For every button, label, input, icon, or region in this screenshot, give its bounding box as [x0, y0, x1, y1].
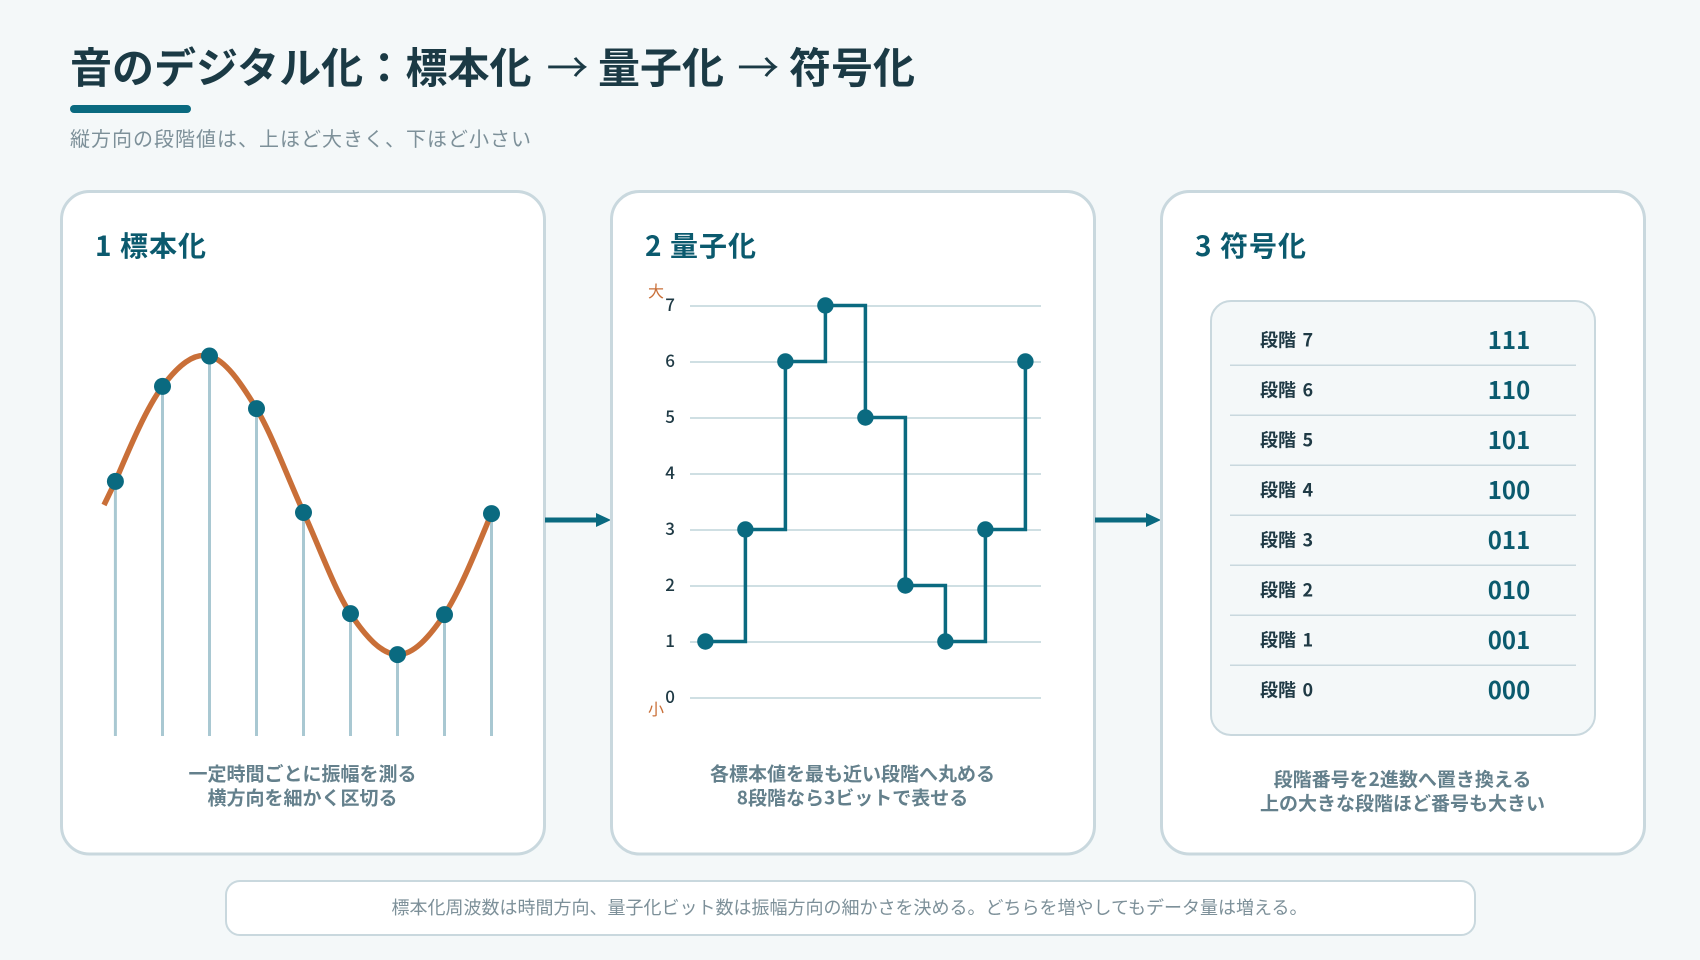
sample stems: [115, 356, 492, 736]
binary codes: 001: [1488, 621, 1530, 656]
level labels: 6: [1302, 376, 1313, 402]
binary codes: 110: [1488, 371, 1530, 406]
quantized points: [697, 297, 1034, 650]
axis level labels: 3: [665, 515, 675, 540]
binary codes: 010: [1488, 571, 1530, 606]
binary codes: 101: [1488, 421, 1530, 456]
title underline: [70, 105, 191, 113]
level labels: 段階: [1260, 376, 1296, 402]
level labels: 0: [1302, 676, 1313, 702]
panel heading: coding: 3: [1195, 225, 1213, 265]
title: 音のデジタル化：: [70, 35, 405, 96]
level labels: 5: [1302, 426, 1313, 452]
level labels: 段階: [1260, 326, 1296, 352]
row separators: [1230, 365, 1576, 665]
title: 符号化: [789, 35, 915, 96]
chart: sampled waveform: [104, 348, 500, 736]
step line: [705, 306, 1025, 642]
sample points: [107, 348, 500, 663]
caption: coding: 上の大きな段階ほど番号も大きい: [1260, 789, 1545, 816]
panel heading: sampling: 1: [95, 225, 113, 265]
code table: [1211, 301, 1595, 735]
axis level labels: 6: [665, 347, 675, 372]
title: →: [737, 35, 779, 96]
level grid lines: [690, 306, 1041, 698]
arrow: quantization to coding: [1095, 513, 1161, 527]
level labels: 1: [1302, 626, 1313, 652]
axis level labels: 0: [665, 683, 675, 708]
binary codes: [1488, 321, 1530, 706]
level labels: 3: [1302, 526, 1313, 552]
axis label: large: 大: [648, 278, 664, 302]
level labels: 4: [1302, 476, 1314, 502]
level labels: 段階: [1260, 526, 1296, 552]
panel heading: quantization: 量子化: [670, 225, 757, 265]
caption: sampling: 横方向を細かく区切る: [207, 784, 398, 810]
title: →: [546, 35, 589, 96]
axis label: small: 小: [648, 696, 664, 720]
caption: quantization: 各標本値を最も近い段階へ丸める: [710, 760, 995, 786]
level labels: 段階: [1260, 476, 1296, 502]
caption: sampling: 一定時間ごとに振幅を測る: [188, 760, 417, 786]
panel heading: quantization: 2: [645, 225, 663, 265]
level labels: 7: [1302, 326, 1313, 352]
arrow: sampling to quantization: [545, 513, 611, 527]
binary codes: 011: [1488, 521, 1530, 556]
axis level labels: 7: [665, 291, 675, 316]
axis level labels: 4: [665, 459, 675, 484]
footer box: [226, 881, 1475, 935]
axis level labels: 1: [665, 627, 675, 652]
level labels: 2: [1302, 576, 1313, 602]
panel: quantization: [612, 192, 1094, 854]
level labels: 段階: [1260, 426, 1296, 452]
chart: quantized steps: [648, 278, 1041, 720]
panel: sampling: [62, 192, 544, 854]
footer note: 標本化周波数は時間方向、量子化ビット数は振幅方向の細かさを決める。どちらを増やしてもデータ量は増える。: [391, 894, 1308, 920]
title: 量子化: [598, 35, 724, 96]
binary codes: 000: [1488, 671, 1530, 706]
panel heading: coding: 符号化: [1220, 225, 1307, 265]
panel heading: sampling: 標本化: [120, 225, 207, 265]
subtitle: 縦方向の段階値は、上ほど大きく、下ほど小さい: [70, 123, 532, 152]
caption: coding: 段階番号を2進数へ置き換える: [1274, 765, 1531, 792]
panel: coding: [1162, 192, 1644, 854]
level labels: 段階: [1260, 676, 1296, 702]
binary codes: 100: [1488, 471, 1530, 506]
axis level labels: 5: [665, 403, 675, 428]
sine wave: [104, 355, 491, 655]
axis level labels: 2: [665, 571, 675, 596]
level labels: 段階: [1260, 626, 1296, 652]
level labels: 段階: [1260, 576, 1296, 602]
title: 標本化: [406, 35, 532, 96]
caption: quantization: 8段階なら3ビットで表せる: [737, 784, 968, 810]
axis level labels: [665, 291, 675, 708]
binary codes: 111: [1488, 321, 1530, 356]
level labels: [1260, 326, 1314, 702]
